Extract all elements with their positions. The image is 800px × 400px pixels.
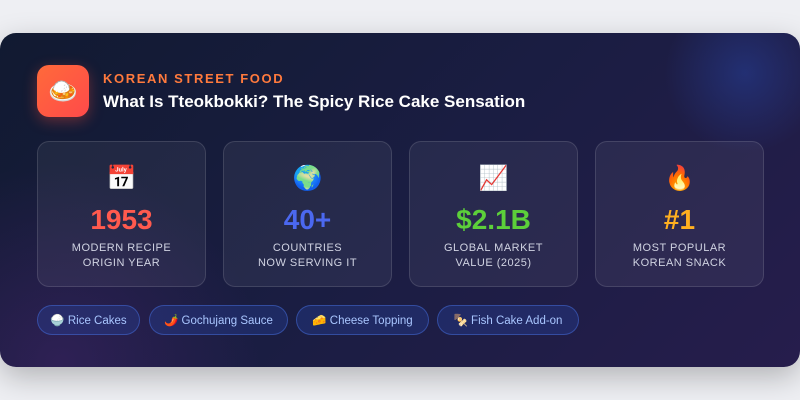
chip: fish cake — [437, 305, 579, 335]
stat: 40+: NOW SERVING IT — [258, 257, 357, 269]
chip: rice cakes: 🍚 Rice Cakes — [50, 315, 127, 327]
stat: $2.1B: VALUE (2025) — [455, 257, 532, 269]
stat: 1953: 1953 — [90, 204, 153, 235]
stat: #1: MOST POPULAR — [633, 242, 726, 254]
stat: #1: 🔥 — [665, 165, 694, 192]
chip: cheese — [296, 305, 429, 335]
chip: gochujang: 🌶️ Gochujang Sauce — [164, 315, 273, 327]
stat: 1953: 📅 — [107, 165, 136, 192]
chip: fish cake: 🍢 Fish Cake Add-on — [454, 315, 562, 327]
stat: 40+: 🌍 — [293, 165, 322, 192]
stat: #1: #1 — [664, 204, 695, 235]
icon: tteokbokki — [37, 65, 89, 117]
kicker: KOREAN STREET FOOD — [103, 71, 284, 86]
stat: 1953 — [37, 141, 206, 287]
stat: 40+: 40+ — [284, 204, 331, 235]
stat: $2.1B: $2.1B — [456, 204, 531, 235]
stat: $2.1B: 📈 — [479, 165, 508, 192]
stat: $2.1B — [409, 141, 578, 287]
icon: tteokbokki: 🍛 — [48, 78, 78, 104]
stat: 40+: COUNTRIES — [273, 242, 342, 254]
stat: 1953: MODERN RECIPE — [72, 242, 171, 254]
chip: gochujang — [149, 305, 288, 335]
stat: #1 — [595, 141, 764, 287]
chip: rice cakes — [37, 305, 140, 335]
stat: 40+ — [223, 141, 392, 287]
chip: cheese: 🧀 Cheese Topping — [312, 315, 413, 327]
stat: $2.1B: GLOBAL MARKET — [444, 242, 543, 254]
title: What Is Tteokbokki? The Spicy Rice Cake Sensation — [103, 92, 525, 111]
stat: #1: KOREAN SNACK — [633, 257, 726, 269]
stat: 1953: ORIGIN YEAR — [83, 257, 160, 269]
